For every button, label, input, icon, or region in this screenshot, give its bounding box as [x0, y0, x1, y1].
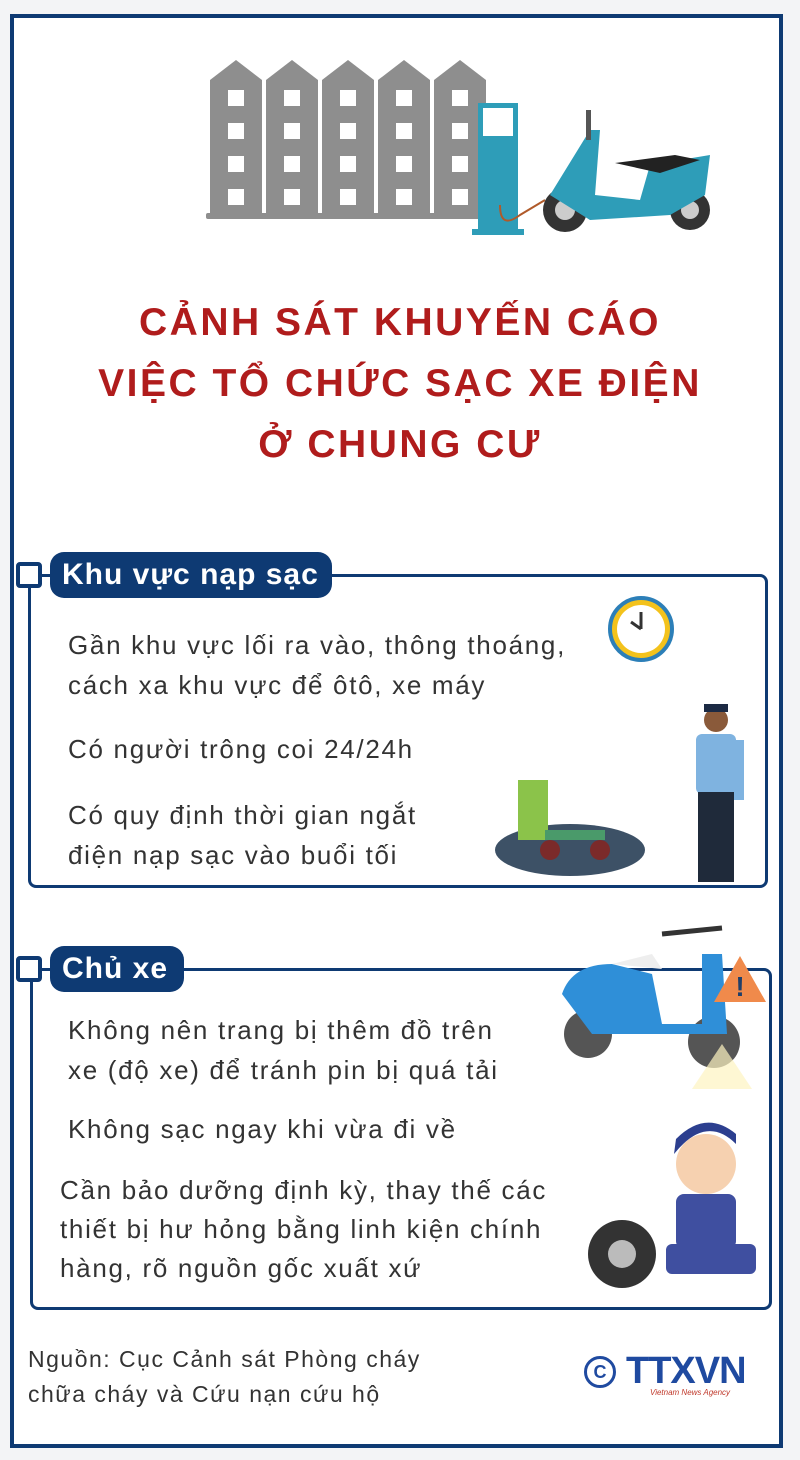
- heading: [50, 552, 332, 598]
- icon: security guard: [696, 704, 744, 882]
- icon: warning: !: [735, 971, 745, 1002]
- text block 2: thiết bị hư hỏng bằng linh kiện chính: [60, 1214, 542, 1244]
- title: Ở CHUNG CƯ: [258, 423, 542, 466]
- heading: [50, 946, 184, 992]
- text block: Có người trông coi 24/24h: [68, 734, 414, 764]
- heading: Khu vực nạp sạc: [62, 558, 319, 591]
- panel: chu xe: [16, 926, 772, 1310]
- text block 2: hàng, rõ nguồn gốc xuất xứ: [60, 1253, 422, 1283]
- icon: blue scooter: [562, 926, 752, 1089]
- icon: warning: [714, 956, 766, 1002]
- panel: khu vuc nap sac: điện nạp sạc vào buổi tối: [68, 840, 398, 870]
- icon: mechanic: [588, 1122, 756, 1288]
- text block: Có quy định thời gian ngắt: [68, 800, 417, 830]
- logo: TTXVN: Vietnam News Agency: [650, 1388, 730, 1397]
- logo: TTXVN: [584, 1350, 746, 1397]
- title: VIỆC TỔ CHỨC SẠC XE ĐIỆN: [98, 362, 702, 405]
- text block: [68, 630, 566, 870]
- text block: xe (độ xe) để tránh pin bị quá tải: [68, 1055, 499, 1085]
- plug icon: [16, 562, 42, 588]
- source text: Nguồn: Cục Cảnh sát Phòng cháy: [28, 1346, 421, 1372]
- logo: TTXVN: TTXVN: [626, 1350, 746, 1392]
- illustration: building with charger and scooter: [206, 60, 710, 235]
- text block: Gần khu vực lối ra vào, thông thoáng,: [68, 630, 566, 660]
- logo: TTXVN: C: [594, 1362, 606, 1382]
- title: CẢNH SÁT KHUYẾN CÁO: [139, 301, 661, 344]
- source text: chữa cháy và Cứu nạn cứu hộ: [28, 1381, 381, 1407]
- panel: khu vuc nap sac: [16, 552, 768, 888]
- heading: Chủ xe: [62, 952, 168, 985]
- source text: [28, 1346, 421, 1407]
- title: [98, 300, 702, 466]
- icon: clock: [608, 596, 674, 662]
- text block 2: Cần bảo dưỡng định kỳ, thay thế các: [60, 1175, 547, 1205]
- text block: Không nên trang bị thêm đồ trên: [68, 1015, 494, 1045]
- plug icon: [16, 956, 42, 982]
- text block: Không sạc ngay khi vừa đi về: [68, 1114, 457, 1144]
- text block: cách xa khu vực để ôtô, xe máy: [68, 670, 486, 700]
- text block: [68, 1015, 499, 1144]
- text block 2: [60, 1175, 547, 1283]
- icon: charging station: [495, 780, 645, 876]
